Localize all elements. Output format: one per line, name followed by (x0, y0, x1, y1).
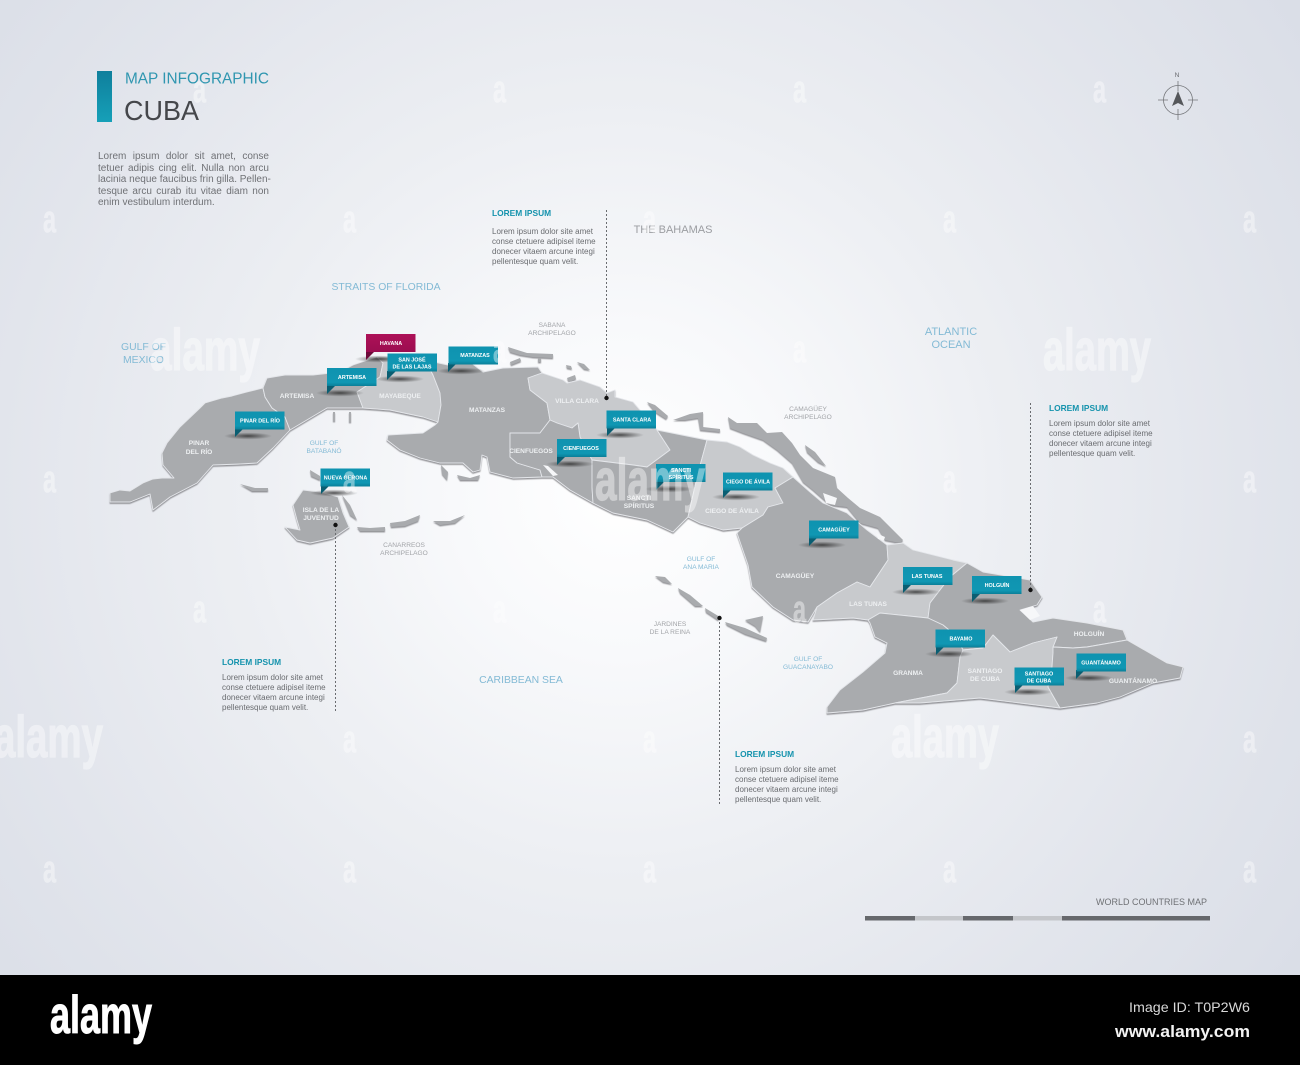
water labels: SABANA (539, 322, 566, 329)
callout: bottom centre (717, 616, 839, 805)
pin: Santa Clara (596, 410, 656, 438)
water labels: BATABANÓ (307, 446, 341, 455)
watermarks: small: a (493, 69, 507, 111)
watermarks: small: a (493, 589, 507, 631)
callout: right: pellentesque quam velit. (1049, 449, 1135, 458)
callout: bottom left: LOREM IPSUM (222, 657, 281, 667)
province: Ciego de Ávila (688, 440, 793, 530)
province labels: PINAR (189, 440, 209, 447)
watermarks: small: a (793, 69, 807, 111)
pin: Havana (355, 334, 416, 362)
pin: Camagüey: CAMAGÜEY (818, 526, 850, 534)
heading: CUBA (124, 95, 200, 126)
pin: Guantánamo: GUANTÁNAMO (1081, 660, 1121, 666)
water labels: CANARREOS (383, 542, 425, 549)
southern keys (240, 412, 767, 641)
scale bar (865, 897, 1210, 920)
pin: San José de las Lajas (376, 354, 437, 382)
watermarks: small: a (343, 719, 357, 761)
callout: bottom left: Lorem ipsum dolor site amet (222, 673, 324, 682)
province labels: GRANMA (893, 670, 923, 677)
pin: Bayamo: BAYAMO (950, 636, 972, 642)
pin: Ciego de Ávila (712, 472, 772, 500)
pin: Pinar del Río (224, 412, 284, 440)
watermarks: small: a (1243, 459, 1257, 501)
callout: bottom left: donecer vitaem arcune integi (222, 693, 325, 702)
pin: Bayamo (925, 630, 985, 658)
intro text: tesque arcu curab itu vitae diam non (98, 186, 269, 196)
pin: Pinar del Río: PINAR DEL RÍO (240, 416, 280, 424)
Holguín bay (1020, 606, 1040, 620)
pin: Santa Clara: SANTA CLARA (613, 418, 651, 424)
water labels: GULF OF (121, 342, 166, 353)
water labels: CAMAGÜEY (789, 405, 827, 413)
image id: Image ID: T0P2W6 (1129, 999, 1250, 1015)
watermarks: small (43, 69, 1257, 891)
province: Isla de la Juventud (285, 490, 349, 543)
callout: top (492, 208, 609, 400)
watermarks: small: a (943, 459, 957, 501)
province labels: ARTEMISA (280, 393, 314, 400)
callout: bottom centre: conse ctetuere adipisel iteme (735, 775, 839, 784)
callout: bottom left: conse ctetuere adipisel iteme (222, 683, 326, 692)
watermarks: small: a (1243, 849, 1257, 891)
province: Guantánamo (1048, 640, 1183, 708)
watermarks: small: a (343, 849, 357, 891)
province labels: SANTIAGO (968, 668, 1002, 675)
watermarks: small: a (193, 589, 207, 631)
watermarks: small: a (43, 199, 57, 241)
pin: Holguín (961, 576, 1022, 604)
province labels: MAYABEQUE (379, 393, 421, 400)
intro text: Lorem ipsum dolor sit amet, conse (98, 151, 269, 162)
watermarks: small: a (343, 459, 357, 501)
pin: Las Tunas: LAS TUNAS (912, 574, 943, 580)
province: Cienfuegos (510, 420, 593, 503)
water labels: ARCHIPELAGO (528, 330, 576, 337)
water labels: GULF OF (310, 440, 338, 447)
accent bar (97, 71, 112, 122)
callout: right: Lorem ipsum dolor site amet (1049, 419, 1151, 428)
province: Sancti Spíritus (592, 430, 707, 532)
callout: top: donecer vitaem arcune integi (492, 247, 595, 256)
province: Matanzas (387, 360, 550, 478)
subtitle: MAP INFOGRAPHIC (125, 70, 269, 88)
watermarks: large: alamy (891, 705, 999, 770)
pin: Las Tunas (892, 567, 952, 596)
pin: Cienfuegos: CIENFUEGOS (563, 446, 599, 452)
water labels: THE BAHAMAS (634, 224, 712, 236)
water labels: STRAITS OF FLORIDA (331, 282, 441, 293)
watermarks: small: a (343, 199, 357, 241)
map of Cuba (110, 347, 1183, 713)
watermarks: large (0, 318, 1151, 770)
province labels: GUANTÁNAMO (1109, 676, 1157, 685)
pin: Camagüey (798, 520, 858, 548)
pin: Matanzas (437, 346, 498, 374)
water labels: JARDINES (654, 621, 687, 628)
watermarks: small: a (793, 589, 807, 631)
callout: top: pellentesque quam velit. (492, 257, 578, 266)
province labels: LAS TUNAS (849, 601, 887, 608)
water labels: CARIBBEAN SEA (479, 675, 563, 686)
watermarks: small: a (1243, 199, 1257, 241)
intro text: lacinia neque faucibus frin gilla. Pellen- (98, 174, 271, 185)
pin: Artemisa: ARTEMISA (338, 375, 366, 381)
callout: bottom left: pellentesque quam velit. (222, 703, 308, 712)
province: Holguín (928, 563, 1127, 652)
province labels: DE CUBA (970, 676, 1000, 683)
watermarks: small: a (43, 459, 57, 501)
pin: Nueva Gerona (310, 468, 370, 496)
watermarks: small: a (43, 849, 57, 891)
water labels: GULF OF (794, 656, 822, 663)
pin: Guantánamo (1065, 654, 1126, 682)
province labels: SPÍRITUS (624, 501, 655, 510)
footer url: www.alamy.com (1114, 1022, 1250, 1041)
province labels: VILLA CLARA (555, 398, 599, 405)
province labels: CIEGO DE ÁVILA (705, 506, 759, 515)
watermarks: small: a (643, 849, 657, 891)
province: Las Tunas (813, 543, 967, 620)
Camagüey key bays (823, 493, 885, 540)
pin: Santiago de Cuba: DE CUBA (1027, 678, 1051, 684)
watermarks: small: a (943, 849, 957, 891)
province labels: ISLA DE LA (303, 507, 339, 514)
watermarks: small: a (493, 329, 507, 371)
callout: right: conse ctetuere adipisel iteme (1049, 429, 1153, 438)
water labels (121, 224, 977, 686)
footer logo: alamy (50, 986, 152, 1045)
province: Granma (827, 613, 963, 713)
watermarks: small: a (643, 719, 657, 761)
pin: Nueva Gerona: NUEVA GERONA (324, 476, 367, 482)
pin: Cienfuegos (546, 439, 606, 468)
province labels: MATANZAS (469, 407, 506, 414)
watermarks: large: alamy (1043, 318, 1151, 383)
callout: bottom centre: donecer vitaem arcune integi (735, 785, 838, 794)
northern keys (508, 347, 903, 543)
callout: right (1028, 403, 1153, 592)
callout: bottom centre: Lorem ipsum dolor site amet (735, 765, 837, 774)
water labels: GULF OF (687, 556, 715, 563)
province: Camagüey (737, 477, 888, 622)
watermarks: large: alamy (150, 318, 260, 383)
compass (1158, 72, 1198, 120)
intro text: tetuer adipis cing elit. Nulla non arcu (98, 162, 269, 174)
water labels: MEXICO (123, 355, 164, 366)
province: Santiago de Cuba (895, 635, 1060, 708)
pin: San José de las Lajas: DE LAS LAJAS (393, 364, 432, 370)
callout: top: conse ctetuere adipisel iteme (492, 237, 596, 246)
pin: Matanzas: MATANZAS (460, 353, 490, 359)
water labels: ARCHIPELAGO (380, 550, 428, 557)
pin: San José de las Lajas: SAN JOSÉ (398, 356, 426, 364)
watermarks: small: a (193, 69, 207, 111)
province labels: DEL RÍO (186, 447, 212, 456)
water labels: OCEAN (931, 339, 971, 351)
callout: bottom centre: pellentesque quam velit. (735, 795, 821, 804)
pin: Havana: HAVANA (380, 341, 402, 347)
pin: Ciego de Ávila: CIEGO DE ÁVILA (726, 478, 770, 486)
watermarks: small: a (1093, 589, 1107, 631)
callout: right: LOREM IPSUM (1049, 403, 1108, 413)
province labels: HOLGUÍN (1074, 629, 1104, 638)
province labels: SANCTI (627, 495, 651, 502)
watermarks: small: a (793, 329, 807, 371)
watermarks: small: a (643, 199, 657, 241)
callout: bottom centre: LOREM IPSUM (735, 749, 794, 759)
intro text (98, 151, 271, 208)
pin: Sancti Spíritus: SANCTI (671, 468, 692, 474)
callout: right: donecer vitaem arcune integi (1049, 439, 1152, 448)
water labels: DE LA REINA (650, 629, 691, 636)
province: Villa Clara (528, 373, 670, 467)
province labels: JUVENTUD (303, 515, 339, 522)
callout: top: Lorem ipsum dolor site amet (492, 227, 594, 236)
title block (97, 70, 269, 126)
intro text: enim vestibulum interdum. (98, 197, 215, 208)
water labels: GUACANAYABO (783, 664, 833, 671)
province: Artemisa (263, 357, 383, 430)
pin: Sancti Spíritus (645, 464, 706, 492)
footer band (0, 975, 1300, 1065)
pin: Holguín: HOLGUÍN (985, 581, 1010, 589)
water labels: ANA MARIA (683, 564, 720, 571)
water labels: ATLANTIC (925, 326, 977, 338)
pin: Sancti Spíritus: SPÍRITUS (669, 473, 694, 481)
compass: N (1175, 72, 1180, 79)
watermarks: small: a (1093, 69, 1107, 111)
watermarks: large: alamy (595, 448, 705, 513)
province: Mayabeque (357, 357, 441, 422)
province labels (186, 393, 1157, 685)
callout: top: LOREM IPSUM (492, 208, 551, 218)
Cienfuegos bay (543, 465, 558, 476)
province labels: CAMAGÜEY (776, 571, 815, 580)
callout: bottom left (222, 523, 338, 712)
pin: Santiago de Cuba (1004, 668, 1064, 696)
pin: Artemisa (316, 368, 376, 396)
water labels: ARCHIPELAGO (784, 414, 832, 421)
scale bar: WORLD COUNTRIES MAP (1096, 897, 1207, 907)
watermarks: small: a (1243, 719, 1257, 761)
watermarks: small: a (943, 199, 957, 241)
pin: Santiago de Cuba: SANTIAGO (1025, 672, 1053, 678)
province labels: CIENFUEGOS (509, 448, 553, 455)
province: Pinar del Río (110, 388, 290, 510)
